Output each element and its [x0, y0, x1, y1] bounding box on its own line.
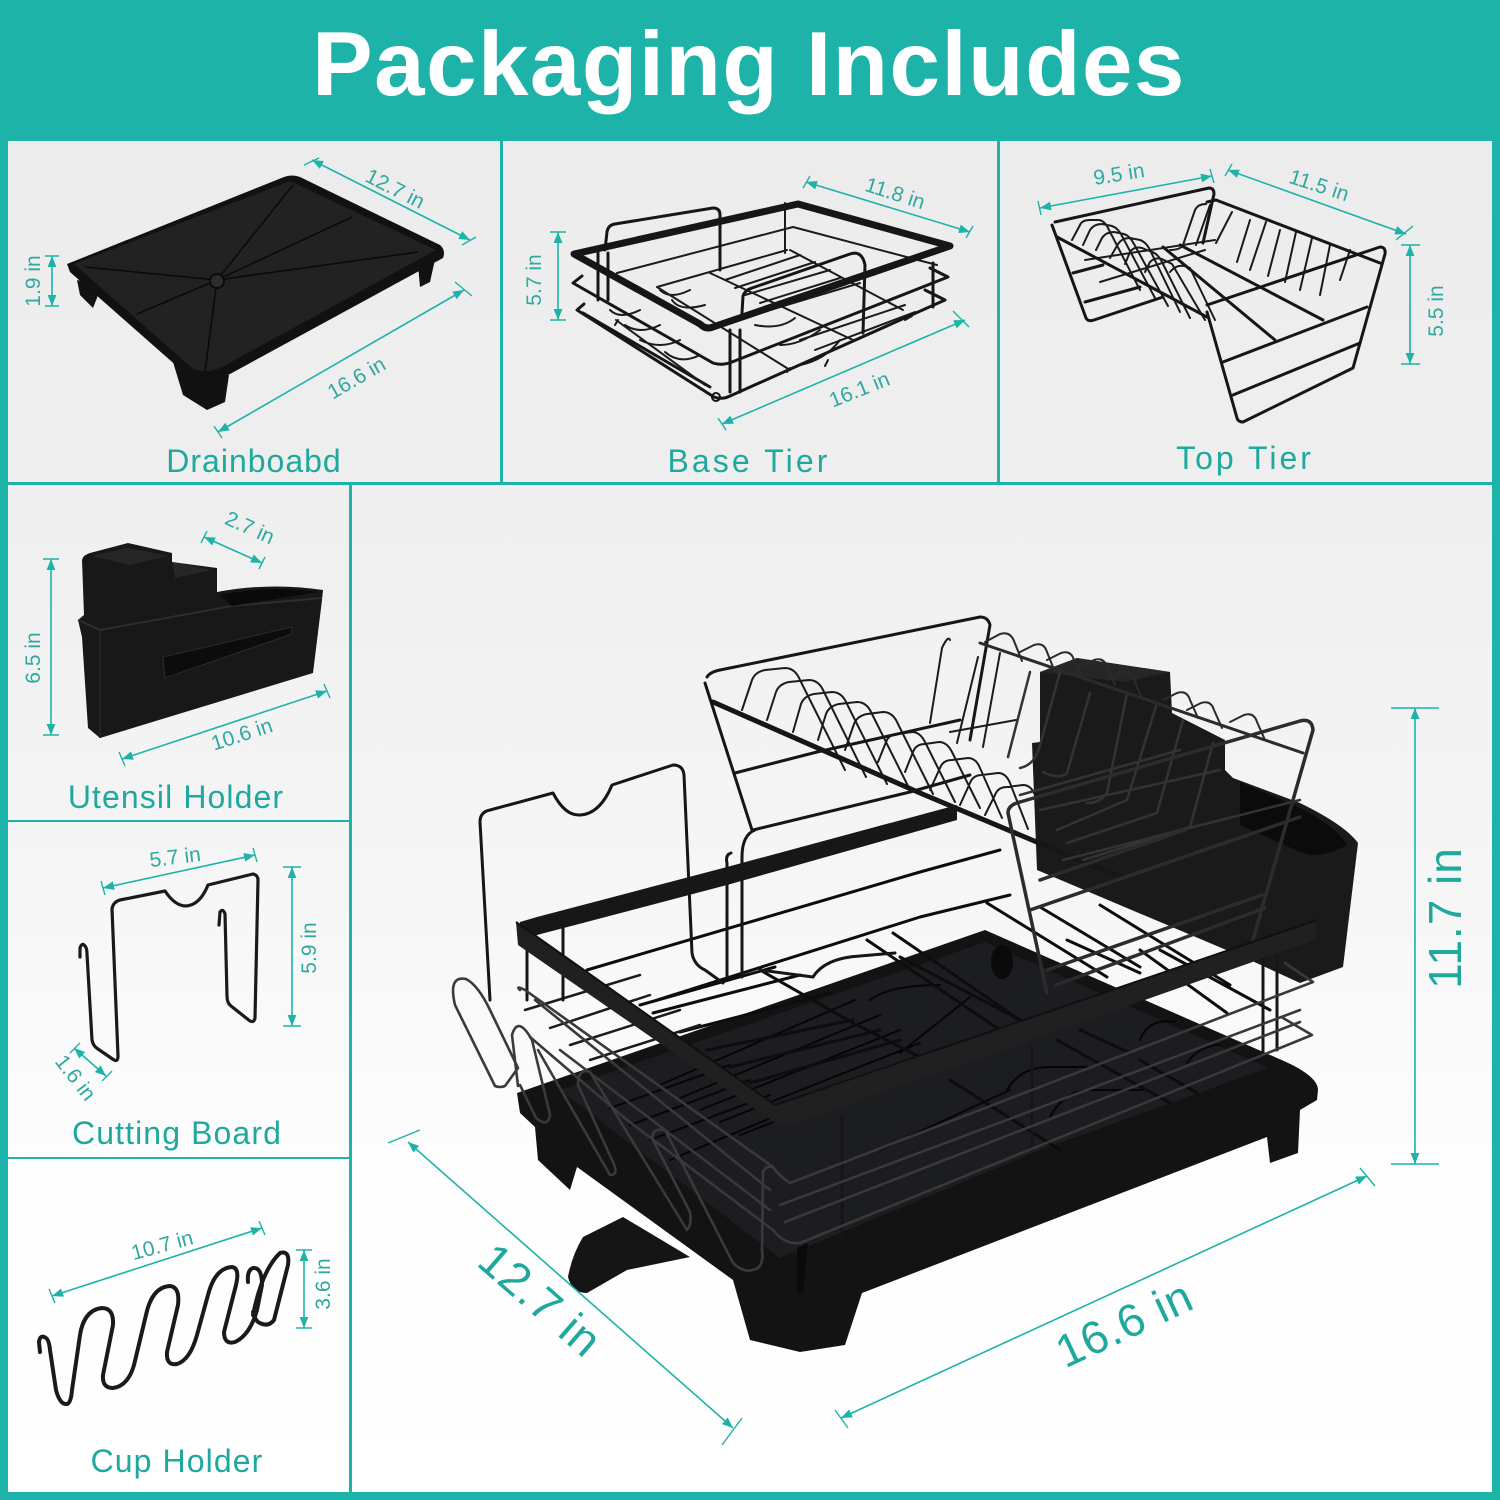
dimension: 11.7 in: [1391, 708, 1471, 1164]
dimension: 1.6 in: 1.6 in: [50, 1051, 100, 1105]
dimension: 11.5 in: [1225, 164, 1413, 240]
support posts: [527, 830, 1277, 1237]
dimension: 5.7 in: 5.7 in: [148, 843, 202, 872]
dimension: 10.6 in: [119, 684, 330, 766]
dimension: 3.6 in: [296, 1250, 335, 1328]
dimension: 12.7 in: 12.7 in: [362, 165, 428, 214]
dimension: 12.7 in: [304, 158, 476, 245]
icon: assembled dish rack: [453, 617, 1358, 1352]
spout: [568, 1217, 690, 1293]
label: Drainboabd: Drainboabd: [166, 443, 342, 479]
icon: drainboard: [67, 176, 444, 410]
dimension: 2.7 in: [201, 507, 278, 569]
dimension: 1.9 in: [22, 255, 59, 307]
icon: base tier rack: [573, 203, 950, 401]
dimension: 16.6 in: 16.6 in: [324, 353, 390, 404]
dimension: 6.5 in: [22, 559, 59, 735]
dimension: 5.7 in: 5.7 in: [523, 254, 546, 306]
cup holder on rack: [453, 979, 773, 1271]
dimension: 16.1 in: [718, 311, 969, 430]
lower basket rims: [518, 963, 1313, 1243]
panel: drainboard: [8, 141, 500, 482]
dimension: 9.5 in: [1038, 159, 1214, 215]
dimension: 11.7 in: 11.7 in: [1419, 847, 1471, 989]
title: Packaging Includes: [312, 14, 1186, 115]
dimension: 9.5 in: 9.5 in: [1092, 159, 1146, 190]
dimension: 11.8 in: 11.8 in: [862, 173, 928, 214]
panel: base tier: [503, 141, 997, 482]
upper basket frame: [516, 920, 1317, 1125]
drip tray: [517, 930, 1318, 1352]
dimension: 5.9 in: 5.9 in: [298, 922, 321, 974]
dimension: 5.9 in: [283, 867, 321, 1026]
dimension: 12.7 in: 12.7 in: [469, 1233, 612, 1367]
dimension: 16.6 in: [835, 1168, 1375, 1428]
dimension: 5.7 in: [101, 843, 257, 895]
cutting board holder: [480, 765, 723, 1000]
dimension: 1.9 in: 1.9 in: [22, 255, 45, 307]
dimension: 10.6 in: 10.6 in: [208, 714, 276, 755]
dimension: 16.1 in: 16.1 in: [826, 367, 893, 412]
upper floor and lower rods: [525, 850, 1270, 1150]
icon: cup holder: [39, 1252, 288, 1404]
icon: top tier rack: [1052, 188, 1385, 422]
dimension: 5.5 in: 5.5 in: [1425, 285, 1448, 337]
dimension: 12.7 in: [388, 1130, 742, 1445]
dimension: 2.7 in: 2.7 in: [221, 507, 278, 549]
label: Base Tier: Base Tier: [667, 443, 831, 479]
utensil holder behind rack: [1032, 658, 1358, 983]
top tier plate rack: [705, 617, 1313, 993]
label: Utensil Holder: Utensil Holder: [68, 779, 284, 815]
panel: cutting board: [8, 822, 349, 1157]
upper basket frame highlight: [516, 920, 1317, 1105]
label: Cup Holder: Cup Holder: [91, 1443, 263, 1479]
panel: top tier: [1000, 141, 1492, 482]
dimension: 16.6 in: 16.6 in: [1047, 1269, 1201, 1378]
panel: utensil holder: [8, 485, 349, 820]
dimension: 10.7 in: 10.7 in: [129, 1226, 196, 1265]
panel: assembled rack: [352, 485, 1492, 1492]
lower feet peg: [797, 1243, 808, 1292]
icon: utensil holder: [78, 543, 323, 738]
label: Cutting Board: Cutting Board: [72, 1115, 282, 1151]
dimension: 10.7 in: [49, 1221, 265, 1303]
dimension: 11.8 in: [803, 173, 973, 238]
dimension: 16.6 in: [214, 282, 472, 438]
icon: cutting board holder: [80, 874, 258, 1060]
tray slats: [610, 985, 1220, 1160]
dimension: 11.5 in: 11.5 in: [1286, 165, 1352, 206]
dimension: 5.5 in: [1401, 245, 1448, 364]
label: Top Tier: Top Tier: [1176, 440, 1314, 476]
upper basket back strip: [520, 805, 957, 940]
dimension: 3.6 in: 3.6 in: [312, 1258, 335, 1310]
dimension: 5.7 in: [523, 232, 566, 320]
panel: cup holder: [8, 1159, 349, 1492]
dimension: 6.5 in: 6.5 in: [22, 632, 45, 684]
